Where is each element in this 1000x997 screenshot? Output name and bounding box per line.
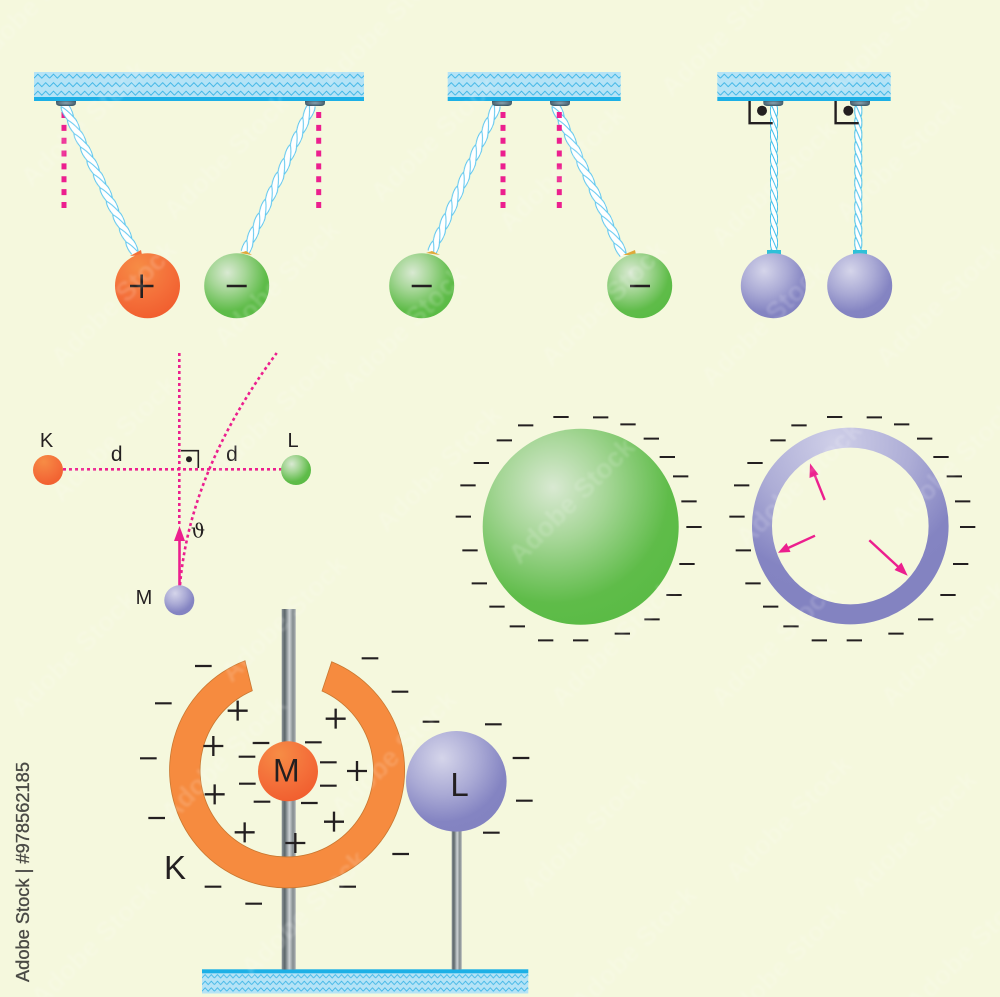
rope right <box>854 105 862 251</box>
watermark: Adobe Stock <box>695 254 833 393</box>
rope right <box>550 103 628 257</box>
purple ring <box>752 428 949 624</box>
rope left <box>59 103 139 255</box>
label M: M <box>273 752 300 788</box>
right angle mark left <box>750 101 773 123</box>
ball M <box>258 741 318 801</box>
rope left <box>427 103 502 254</box>
watermark: Adobe Stock <box>45 234 183 373</box>
panel: charged hollow shell <box>729 417 975 640</box>
pivot left <box>56 101 76 106</box>
ceiling bar 3 <box>717 72 891 101</box>
minus charges <box>140 658 533 904</box>
watermark: Adobe Stock <box>158 87 296 226</box>
rope left <box>770 105 778 251</box>
negative ball right <box>607 250 672 318</box>
stock id side text: Adobe Stock | #978562185 <box>13 762 33 982</box>
ball L <box>281 455 311 485</box>
label L: L <box>450 766 469 803</box>
right angle mark right <box>836 101 859 123</box>
watermark: Adobe Stock <box>325 684 463 823</box>
label L: L <box>287 430 299 452</box>
negative ball left <box>389 251 454 318</box>
horizontal dotted line <box>63 468 282 471</box>
pivot left <box>763 101 783 106</box>
rope right <box>240 103 317 254</box>
green sphere <box>483 429 679 625</box>
label d right: d <box>226 443 238 466</box>
watermark: Adobe Stock <box>205 344 343 483</box>
panel: opposite charges attract <box>34 72 364 318</box>
watermark: Adobe Stock <box>365 69 503 208</box>
watermark: Adobe Stock <box>720 749 858 888</box>
panel: charged solid sphere <box>456 417 702 640</box>
arrow down-left <box>778 536 815 553</box>
ceiling bar 2 <box>448 72 621 101</box>
ball M <box>164 585 194 615</box>
surface charges <box>729 417 975 640</box>
panel: like charges repel <box>389 72 672 318</box>
velocity arrow <box>174 526 185 586</box>
pivot right <box>550 101 570 106</box>
watermark: Adobe Stock <box>235 844 373 983</box>
pivot right <box>305 101 325 106</box>
vertical reference line left <box>62 112 66 208</box>
right angle mark <box>181 451 198 468</box>
negative ball <box>204 251 269 318</box>
ceiling bar 1 <box>34 72 364 101</box>
watermark: Adobe Stock <box>215 549 353 688</box>
watermark: Adobe Stock <box>370 399 508 538</box>
watermark: Adobe Stock <box>705 114 843 253</box>
neutral ball right <box>827 250 892 318</box>
arrow up-left <box>810 463 825 500</box>
deflected dotted path <box>180 353 277 585</box>
panel: charge deflection between K and L <box>33 353 311 615</box>
watermark: Adobe Stock <box>730 414 868 553</box>
vertical reference line right <box>557 112 562 208</box>
watermark: Adobe Stock <box>845 764 983 903</box>
panel: conducting shell K with inner ball M and sphere L <box>140 609 533 994</box>
positive ball <box>115 250 180 318</box>
vertical reference line left <box>500 112 506 208</box>
surface charges <box>456 417 702 640</box>
watermark: Adobe Stock <box>830 89 968 228</box>
pivot right <box>850 101 870 106</box>
watermark: Adobe Stock <box>5 584 143 723</box>
rod K <box>282 609 296 970</box>
label K: K <box>164 849 186 886</box>
arrow down-right <box>869 540 908 576</box>
vertical reference line right <box>316 112 321 208</box>
label M: M <box>136 587 152 609</box>
vertical dotted line <box>178 353 181 527</box>
watermark: Adobe Stock <box>545 574 683 713</box>
label theta: ϑ <box>191 518 205 542</box>
base bar <box>202 969 528 994</box>
watermark: Adobe Stock <box>208 214 346 353</box>
panel: neutral balls hang straight <box>717 72 892 318</box>
watermark: Adobe Stock <box>503 431 641 570</box>
watermark: Adobe Stock <box>15 54 153 193</box>
label K: K <box>40 430 54 452</box>
watermark: Adobe Stock <box>535 234 673 373</box>
watermark: Adobe Stock <box>335 259 473 398</box>
ball K <box>33 455 63 485</box>
watermark: Adobe Stock <box>705 574 843 713</box>
watermark: Adobe Stock <box>493 99 631 238</box>
plus charges <box>203 701 367 853</box>
label d left: d <box>111 443 123 466</box>
watermark: Adobe Stock <box>45 369 183 508</box>
ball L <box>406 731 507 832</box>
pivot left <box>492 101 512 106</box>
shell K <box>170 661 405 888</box>
rod L <box>452 825 462 970</box>
watermark: Adobe Stock <box>155 689 293 828</box>
neutral ball left <box>741 250 806 318</box>
watermark: Adobe Stock <box>515 764 653 903</box>
